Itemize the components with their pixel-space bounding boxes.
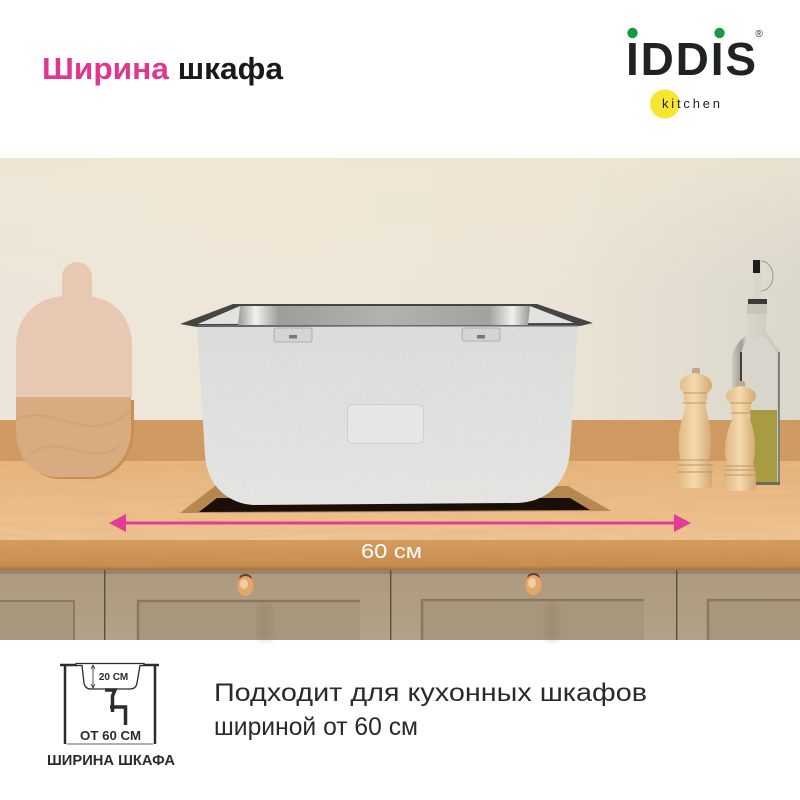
sink outline	[76, 664, 144, 689]
pepper mill large	[677, 368, 713, 488]
mounting clip left	[274, 328, 312, 342]
sink rim and steel interior	[180, 304, 593, 327]
width arrow in diagram	[67, 743, 153, 745]
logo: IDDIS kitchen: kitchen	[662, 96, 720, 111]
mounting clip right	[462, 328, 500, 341]
title: Ширина шкафа	[42, 51, 284, 86]
description text: шириной от 60 см	[214, 713, 418, 741]
depth label: 20 СМ	[99, 672, 128, 683]
cutting board	[16, 262, 134, 479]
wall	[0, 158, 800, 421]
countertop front edge	[0, 540, 800, 570]
width label in diagram: ОТ 60 СМ	[80, 728, 141, 743]
width label: 60 см	[361, 541, 422, 563]
cabinet walls and countertop	[60, 665, 159, 744]
cabinet diagram	[47, 664, 176, 769]
cabinet knob right	[526, 573, 542, 595]
wooden backsplash	[0, 420, 800, 462]
kitchen scene	[0, 158, 800, 640]
diagram caption: ШИРИНА ШКАФА	[47, 753, 176, 769]
cabinet doors	[0, 570, 800, 640]
depth arrow	[91, 665, 95, 688]
oil bottle	[732, 260, 780, 485]
sink bowl	[195, 326, 580, 506]
cabinet knob left	[238, 574, 254, 596]
sink label plate	[348, 404, 424, 444]
pepper mill small	[724, 381, 756, 491]
countertop	[0, 461, 800, 541]
logo: IDDIS kitchen: IDDIS	[626, 33, 756, 85]
drain siphon	[105, 690, 126, 725]
description text: Подходит для кухонных шкафов	[214, 679, 647, 707]
logo: IDDIS kitchen	[626, 28, 763, 118]
logo: IDDIS kitchen: ®	[755, 29, 763, 40]
sink cutout in countertop	[180, 486, 611, 513]
width dimension arrow	[109, 514, 691, 532]
